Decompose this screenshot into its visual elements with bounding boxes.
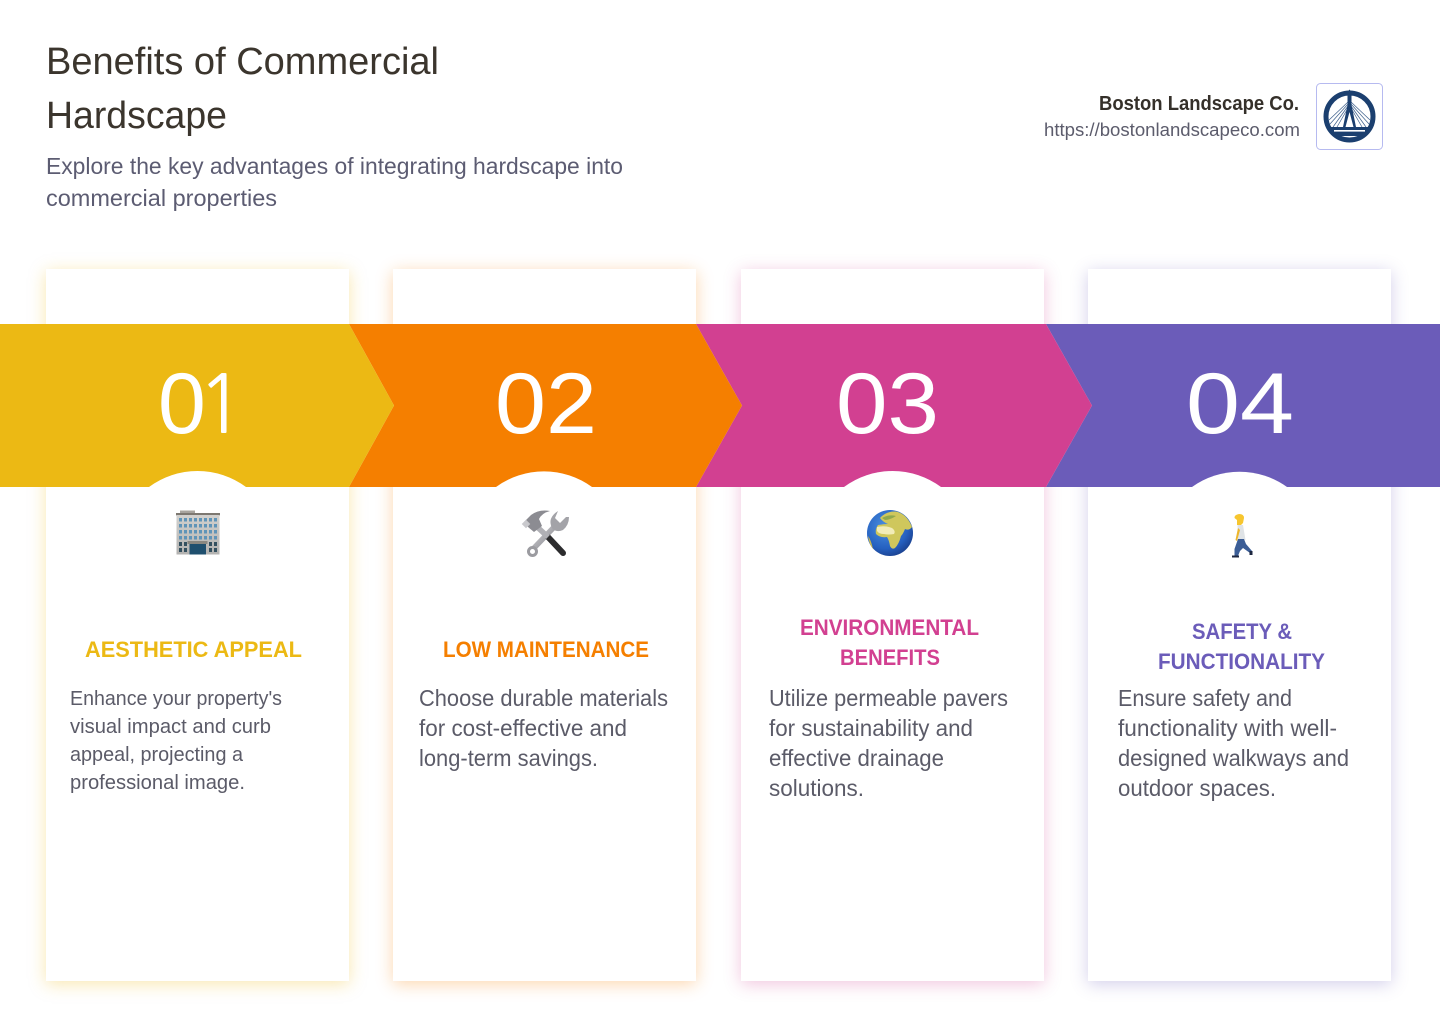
text: card 3 description: solutions.: [769, 775, 864, 801]
text: card 1 description: appeal, projecting a: [70, 744, 244, 766]
white arc notch 3: [844, 471, 941, 487]
panel: card 1 background: [46, 269, 349, 981]
text: card 1 description: visual impact and curb: [70, 716, 271, 738]
company name: Boston Landscape Co.: [1099, 93, 1299, 115]
text: card 1 description: [70, 688, 282, 794]
panel: card 2 background: [393, 269, 696, 981]
text: card 4 description: Ensure safety and: [1118, 685, 1292, 711]
icon: company logo: [1316, 84, 1382, 150]
text: card 2 description: long-term savings.: [419, 745, 598, 771]
heading: safety and functionality: SAFETY &: [1192, 619, 1292, 644]
text: card 4 description: designed walkways and: [1118, 745, 1349, 771]
text: card 3 description: for sustainability and: [769, 715, 973, 741]
heading: safety and functionality: FUNCTIONALITY: [1158, 649, 1325, 674]
text: card 3 description: Utilize permeable pavers: [769, 685, 1008, 711]
number 04: 04: [1186, 356, 1294, 452]
icon: person walking: [1232, 514, 1252, 558]
text: card 1 description: Enhance your property's: [70, 688, 282, 710]
title: Benefits of Commercial: [46, 41, 439, 83]
number 02: 02: [495, 356, 597, 452]
icon: hammer and wrench: [522, 510, 569, 556]
subtitle: Explore the key advantages of integrating hardscape into: [46, 153, 623, 179]
text: card 4 description: [1118, 685, 1349, 801]
heading: environmental benefits: BENEFITS: [840, 645, 940, 670]
text: card 2 description: for cost-effective and: [419, 715, 627, 741]
icon: globe: [867, 510, 913, 556]
heading: environmental benefits: [800, 615, 979, 670]
text: card 3 description: effective drainage: [769, 745, 944, 771]
company url: https://bostonlandscapeco.com: [1044, 119, 1300, 140]
text: card 2 description: Choose durable materials: [419, 685, 668, 711]
white arc notch 2: [496, 471, 592, 487]
white arc notch 4: [1192, 472, 1287, 487]
heading: environmental benefits: ENVIRONMENTAL: [800, 615, 979, 640]
band arrow 03: [696, 324, 1092, 487]
band arrow 02: [349, 324, 742, 487]
text: card 3 description: [769, 685, 1008, 801]
title: [46, 41, 439, 137]
text: card 4 description: functionality with well-: [1118, 715, 1337, 741]
band arrow 01: [0, 324, 394, 487]
panel: card 3 background: [741, 269, 1044, 981]
text: card 1 description: professional image.: [70, 772, 245, 794]
heading: aesthetic appeal: AESTHETIC APPEAL: [85, 637, 302, 662]
text: card 2 description: [419, 685, 668, 771]
panel: card 4 background: [1088, 269, 1391, 981]
subtitle: [46, 153, 623, 211]
heading: low maintenance: LOW MAINTENANCE: [443, 637, 649, 662]
heading: safety and functionality: [1158, 619, 1325, 674]
number 01: 01: [158, 356, 245, 452]
band arrow 04: [1046, 324, 1440, 487]
white arc notch 1: [149, 471, 246, 487]
subtitle: commercial properties: [46, 185, 277, 211]
title: Hardscape: [46, 95, 227, 137]
text: card 4 description: outdoor spaces.: [1118, 775, 1276, 801]
icon: office building: [176, 510, 220, 554]
number 03: 03: [836, 356, 939, 452]
